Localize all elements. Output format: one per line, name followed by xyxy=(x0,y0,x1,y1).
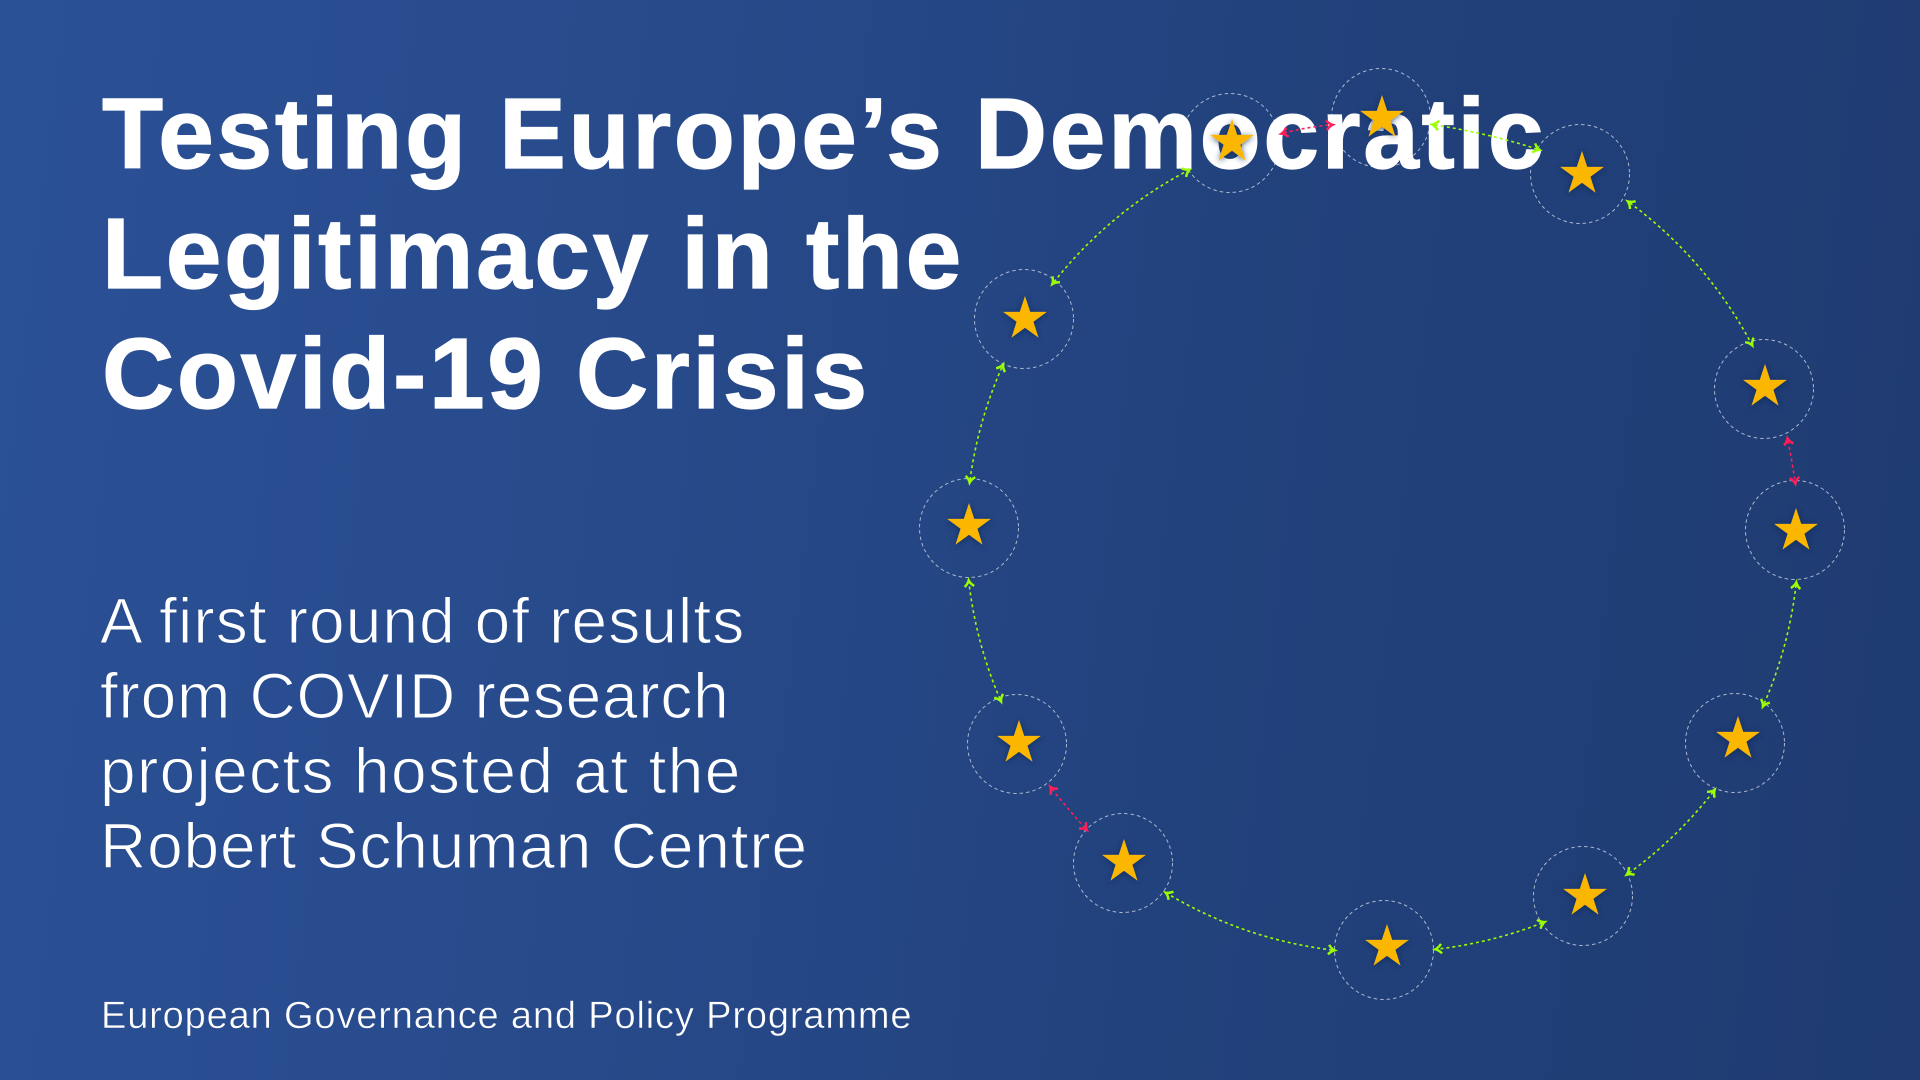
arrows: links between stars xyxy=(969,125,1796,950)
title: Legitimacy in the xyxy=(102,198,964,310)
title: Covid-19 Crisis xyxy=(102,318,870,430)
subtitle xyxy=(100,585,808,882)
subtitle: A first round of results xyxy=(100,585,745,657)
title: Testing Europe’s Democratic xyxy=(102,78,1546,190)
stars xyxy=(947,95,1818,966)
subtitle: projects hosted at the xyxy=(100,735,742,807)
subtitle: from COVID research xyxy=(100,660,730,732)
programme name: European Governance and Policy Programme xyxy=(101,995,912,1037)
subtitle: Robert Schuman Centre xyxy=(100,810,808,882)
title xyxy=(102,78,1546,430)
